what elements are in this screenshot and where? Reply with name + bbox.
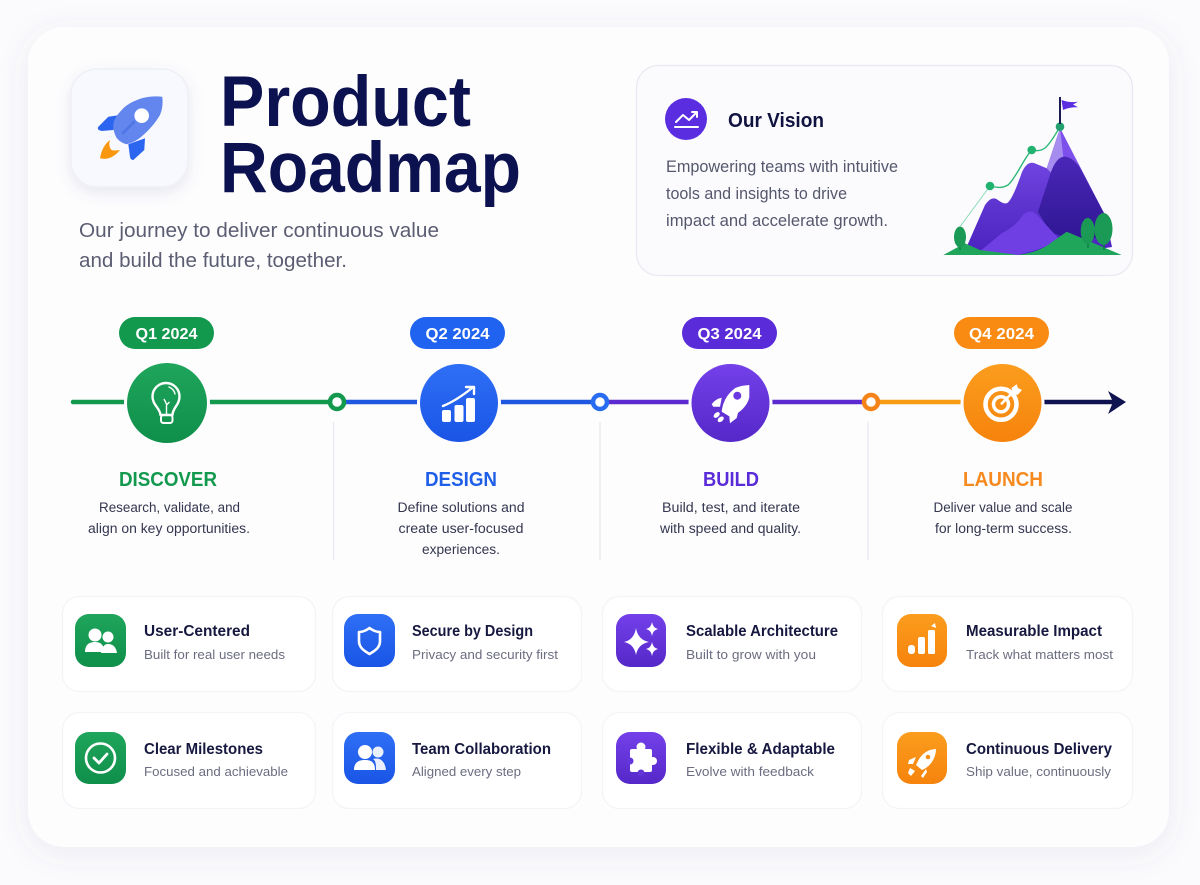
phase: design bbox=[398, 317, 524, 557]
card: measurable impact: Measurable Impact bbox=[966, 623, 1102, 640]
card: flexible and adaptable: Evolve with feedback bbox=[686, 764, 815, 779]
quarter pill bbox=[682, 317, 777, 349]
card: user-centered: User-Centered bbox=[144, 623, 250, 640]
subtitle: and build the future, together. bbox=[79, 249, 347, 272]
icon: target bbox=[960, 361, 1044, 445]
title: Roadmap bbox=[220, 129, 521, 208]
phase name: DISCOVER bbox=[119, 469, 218, 491]
phase description: Research, validate, and bbox=[99, 500, 240, 515]
card: continuous delivery bbox=[882, 712, 1132, 808]
quarter pill bbox=[410, 317, 505, 349]
card: user-centered bbox=[62, 596, 316, 692]
quarter pill: Q2 2024 bbox=[426, 326, 490, 343]
phase description bbox=[88, 500, 250, 536]
card: clear milestones bbox=[62, 712, 316, 808]
phase description: create user-focused bbox=[398, 521, 524, 536]
phase description: for long-term success. bbox=[935, 521, 1072, 536]
separators bbox=[334, 422, 868, 560]
phase description: Deliver value and scale bbox=[934, 500, 1072, 515]
phase description bbox=[934, 500, 1072, 536]
card: secure by design bbox=[332, 596, 582, 692]
icon: sparkles bbox=[616, 614, 666, 667]
timeline nodes bbox=[330, 395, 878, 409]
card: scalable architecture bbox=[602, 596, 862, 692]
phase description: Define solutions and bbox=[398, 500, 524, 515]
card: secure by design: Secure by Design bbox=[412, 623, 533, 640]
illustration: mountain with flag bbox=[943, 97, 1122, 255]
icon: bars bbox=[897, 614, 947, 667]
vision text: impact and accelerate growth. bbox=[666, 212, 888, 230]
icon: light bulb bbox=[124, 360, 210, 446]
subtitle bbox=[79, 219, 439, 272]
card: clear milestones: Focused and achievable bbox=[144, 764, 288, 779]
vision text bbox=[666, 158, 898, 230]
vision heading: Our Vision bbox=[728, 110, 824, 132]
icon: users bbox=[75, 614, 126, 667]
quarter pill: Q1 2024 bbox=[136, 326, 198, 343]
phase name: DESIGN bbox=[425, 469, 497, 491]
icon: rocket bbox=[688, 361, 772, 445]
title bbox=[220, 63, 521, 208]
card: clear milestones: Clear Milestones bbox=[144, 741, 263, 758]
card: scalable architecture: Built to grow with you bbox=[686, 647, 816, 662]
card: team collaboration bbox=[332, 712, 582, 808]
phase description: experiences. bbox=[422, 542, 500, 557]
card: user-centered: Built for real user needs bbox=[144, 647, 286, 662]
panel: our vision bbox=[636, 66, 1132, 276]
icon: rocket bbox=[897, 732, 947, 784]
phase: build bbox=[659, 317, 801, 536]
title: Product bbox=[220, 63, 471, 142]
timeline line and arrow bbox=[73, 391, 1126, 414]
phase name: LAUNCH bbox=[963, 469, 1043, 491]
icon: team bbox=[344, 732, 395, 784]
phase: launch bbox=[934, 317, 1072, 536]
card: continuous delivery: Continuous Delivery bbox=[966, 741, 1112, 758]
quarter pill: Q4 2024 bbox=[969, 326, 1034, 343]
phase description: align on key opportunities. bbox=[88, 521, 250, 536]
quarter pill bbox=[119, 317, 214, 349]
phase: discover bbox=[88, 317, 250, 536]
phase description bbox=[659, 500, 801, 536]
card: continuous delivery: Ship value, continuously bbox=[966, 764, 1112, 779]
vision text: tools and insights to drive bbox=[666, 185, 847, 203]
phase description bbox=[398, 500, 524, 557]
card: team collaboration: Team Collaboration bbox=[412, 741, 551, 758]
icon: check circle bbox=[75, 732, 126, 784]
phase description: with speed and quality. bbox=[659, 521, 801, 536]
card: team collaboration: Aligned every step bbox=[412, 764, 521, 779]
card: flexible and adaptable bbox=[602, 712, 862, 808]
card: measurable impact: Track what matters most bbox=[966, 647, 1113, 662]
icon: shield bbox=[344, 614, 395, 667]
phase description: Build, test, and iterate bbox=[662, 500, 800, 515]
subtitle: Our journey to deliver continuous value bbox=[79, 219, 439, 242]
icon: growth chart bbox=[665, 98, 707, 140]
icon: puzzle bbox=[616, 732, 666, 784]
card: measurable impact bbox=[882, 596, 1132, 692]
quarter pill: Q3 2024 bbox=[698, 326, 762, 343]
quarter pill bbox=[954, 317, 1049, 349]
phase name: BUILD bbox=[703, 469, 759, 491]
card: secure by design: Privacy and security first bbox=[412, 647, 558, 662]
card: flexible and adaptable: Flexible & Adaptable bbox=[686, 741, 835, 758]
app icon: rocket bbox=[71, 69, 188, 187]
vision text: Empowering teams with intuitive bbox=[666, 158, 898, 176]
icon: bar chart arrow bbox=[417, 361, 501, 445]
card: scalable architecture: Scalable Architecture bbox=[686, 623, 838, 640]
